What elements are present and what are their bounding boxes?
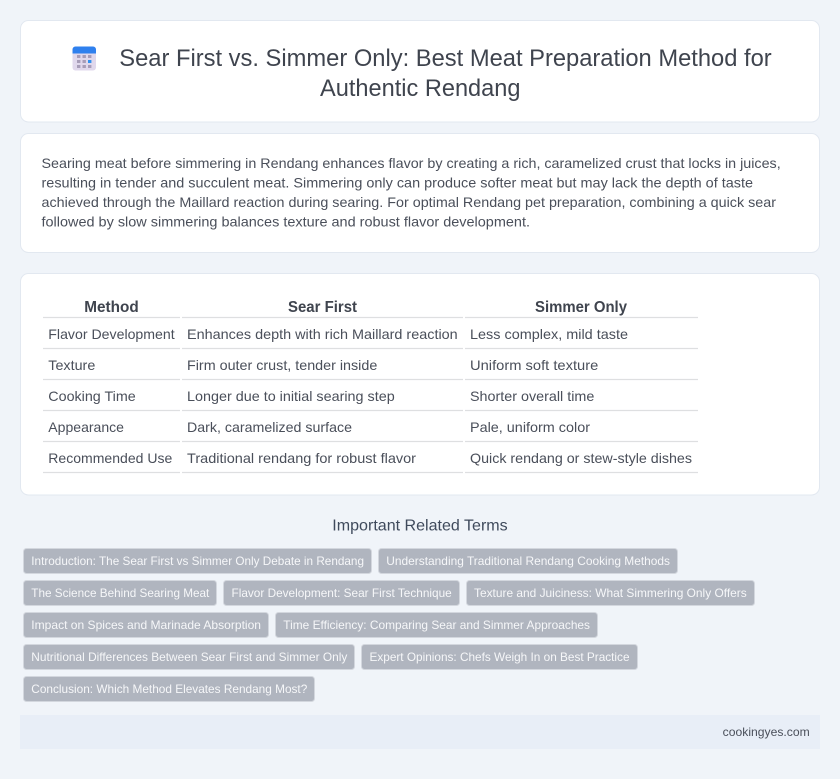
chip: The Science Behind Searing Meat (31, 586, 210, 600)
chip: Impact on Spices and Marinade Absorption (31, 618, 261, 632)
table header (84, 299, 627, 316)
table header: Sear First (288, 299, 358, 316)
table row: flavor development: Flavor Development (48, 326, 175, 342)
table row: flavor development: Less complex, mild taste (470, 326, 628, 342)
table row: flavor development: Enhances depth with rich Maillard reaction (187, 326, 458, 342)
panel: title card (20, 20, 820, 122)
panel: comparison table (20, 274, 820, 495)
chip: Flavor Development: Sear First Technique (232, 586, 452, 600)
chip: Introduction: The Sear First vs Simmer Only Debate in Rendang (31, 554, 364, 568)
table row: recommended use (48, 450, 692, 466)
table row: texture: Texture (48, 357, 96, 373)
table header: Method (84, 299, 139, 316)
chip (378, 548, 678, 574)
icon: calendar (72, 46, 96, 70)
text block: introduction paragraph: followed by slow simmering balances texture and robust flavor development. (42, 214, 530, 230)
chip (24, 548, 372, 574)
table row: cooking time: Shorter overall time (470, 388, 595, 404)
chip: Nutritional Differences Between Sear First and Simmer Only (31, 650, 347, 664)
table row: cooking time: Longer due to initial searing step (187, 388, 395, 404)
table row: recommended use: Traditional rendang for robust flavor (187, 450, 416, 466)
panel: introduction (20, 134, 820, 252)
chip (276, 612, 598, 638)
footer bar (20, 715, 820, 749)
table header: Simmer Only (535, 299, 627, 316)
text block: introduction paragraph: achieved through the Maillard reaction during searing. For optimal Rendang pet preparation, combining a quick sear (42, 194, 776, 210)
chip: Time Efficiency: Comparing Sear and Simmer Approaches (283, 618, 590, 632)
text block: introduction paragraph: Searing meat before simmering in Rendang enhances flavor by creating a rich, caramelized crust that locks in juices, (42, 155, 781, 171)
chip (24, 580, 216, 606)
chip (362, 644, 638, 670)
table row: appearance: Dark, caramelized surface (187, 419, 352, 435)
table row: texture (48, 357, 599, 373)
title (119, 45, 772, 102)
heading: important related terms: Important Related Terms (332, 518, 508, 534)
table row: cooking time: Cooking Time (48, 388, 136, 404)
chip (466, 580, 754, 606)
table row: texture: Uniform soft texture (470, 357, 599, 373)
chip (224, 580, 460, 606)
table row: appearance (48, 419, 590, 435)
chip: Conclusion: Which Method Elevates Rendang Most? (31, 682, 308, 696)
title: Sear First vs. Simmer Only: Best Meat Preparation Method for (119, 45, 772, 72)
chip (24, 644, 354, 670)
title: Authentic Rendang (320, 75, 520, 102)
table row: cooking time (48, 388, 595, 404)
table row: flavor development (48, 326, 628, 342)
chip: Texture and Juiciness: What Simmering Only Offers (474, 586, 747, 600)
chip (24, 612, 268, 638)
table row: appearance: Pale, uniform color (470, 419, 590, 435)
footer source text: cookingyes.com (723, 725, 810, 739)
chip: Expert Opinions: Chefs Weigh In on Best Practice (370, 650, 630, 664)
text block: introduction paragraph (42, 155, 781, 230)
table row: recommended use: Quick rendang or stew-style dishes (470, 450, 692, 466)
chip (24, 676, 314, 702)
table row: recommended use: Recommended Use (48, 450, 173, 466)
table row: appearance: Appearance (48, 419, 124, 435)
table row: texture: Firm outer crust, tender inside (187, 357, 378, 373)
text block: introduction paragraph: resulting in tender and succulent meat. Simmering only can produce softer meat but may lack the depth of taste (42, 174, 753, 190)
chip: Understanding Traditional Rendang Cooking Methods (386, 554, 670, 568)
related terms chips (24, 548, 754, 702)
